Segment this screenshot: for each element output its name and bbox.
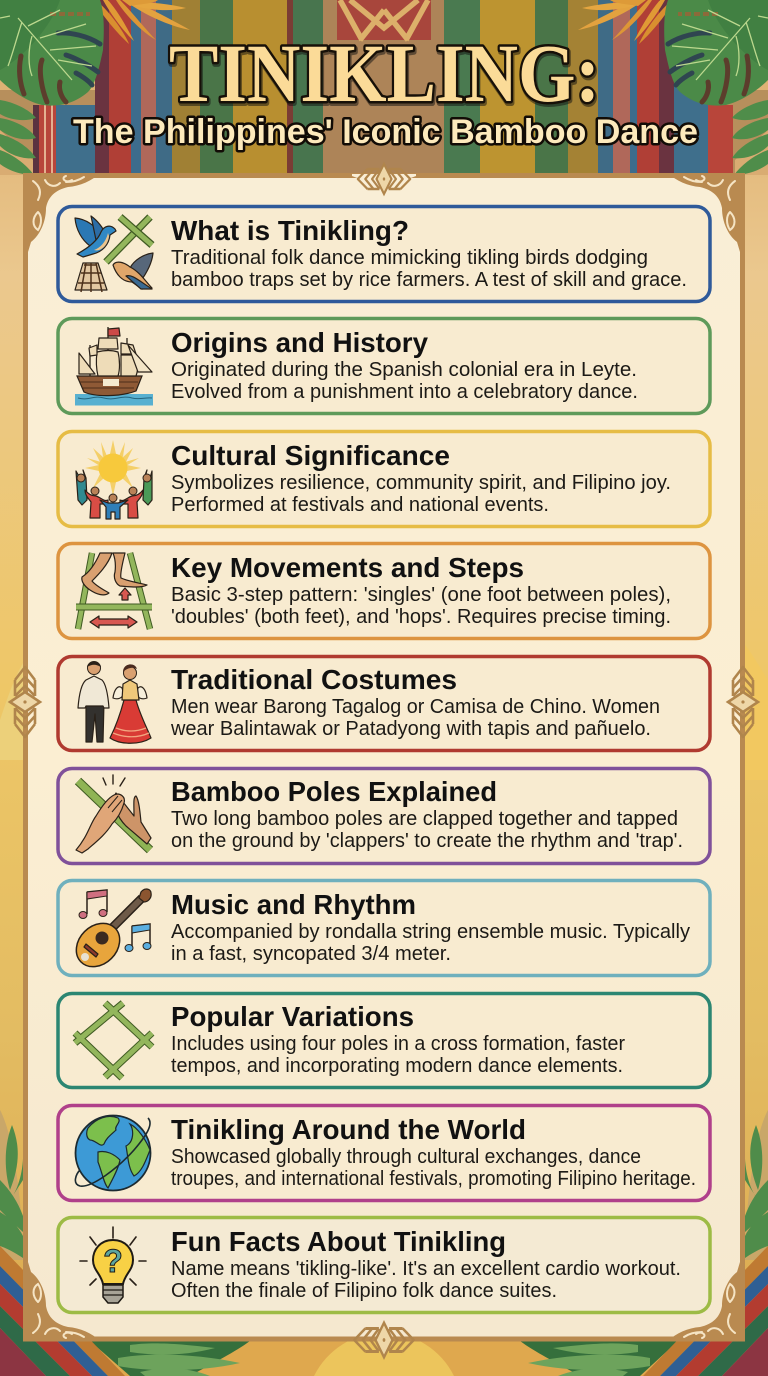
text block: tempos, and incorporating modern dance elements.: [171, 1055, 623, 1077]
text block: Evolved from a punishment into a celebratory dance.: [171, 381, 638, 403]
panel: Bamboo Poles Explained: [58, 768, 710, 864]
text block: bamboo traps set by rice farmers. A test of skill and grace.: [171, 269, 687, 291]
tropical leaves: top right: [578, 0, 768, 175]
icon: man and woman in traditional dress: [78, 662, 151, 743]
heading: Fun Facts About Tinikling: [171, 1226, 506, 1257]
text block: Men wear Barong Tagalog or Camisa de Chino. Women: [171, 696, 660, 718]
bottom scenery: sun, palms and woven bands: [0, 1110, 768, 1376]
heading: Bamboo Poles Explained: [171, 776, 497, 807]
text block: Includes using four poles in a cross formation, faster: [171, 1033, 625, 1055]
text block: Symbolizes resilience, community spirit, and Filipino joy.: [171, 472, 671, 494]
heading: Popular Variations: [171, 1001, 414, 1032]
text block: wear Balintawak or Patadyong with tapis and pañuelo.: [170, 718, 651, 740]
text block: 'doubles' (both feet), and 'hops'. Requires precise timing.: [171, 606, 671, 628]
panel: Key Movements and Steps: [58, 544, 710, 638]
text block: Accompanied by rondalla string ensemble music. Typically: [171, 921, 690, 943]
title: TINIKLING:: [169, 27, 600, 119]
woven diamond motif: [337, 0, 431, 40]
text block: on the ground by 'clappers' to create the rhythm and 'trap'.: [171, 830, 683, 852]
subtitle: The Philippines' Iconic Bamboo Dance: [73, 113, 698, 151]
heading: Music and Rhythm: [171, 889, 416, 920]
heading: Origins and History: [171, 327, 429, 358]
text block: Traditional folk dance mimicking tikling birds dodging: [171, 247, 648, 269]
heading: Cultural Significance: [171, 440, 450, 471]
panel: What is Tinikling?: [58, 206, 710, 302]
icon: four bamboo poles in a cross formation: [75, 1003, 152, 1078]
title: TINIKLING:: [170, 29, 601, 121]
panel: Popular Variations: [58, 994, 710, 1088]
text block: Name means 'tikling-like'. It's an excellent cardio workout.: [171, 1258, 681, 1280]
woven textile stripes banner: [0, 0, 768, 175]
text block: Two long bamboo poles are clapped together and tapped: [171, 808, 678, 830]
tropical leaves: top left: [0, 0, 190, 175]
icon: globe with orbit: [75, 1116, 150, 1190]
panel: Traditional Costumes: [58, 656, 710, 750]
text block: Performed at festivals and national events.: [171, 494, 549, 516]
text block: Showcased globally through cultural exchanges, dance: [171, 1146, 641, 1168]
heading: Tinikling Around the World: [171, 1114, 526, 1145]
icon: sun and circle of people: [76, 440, 152, 519]
heading: Traditional Costumes: [171, 664, 457, 695]
text block: Originated during the Spanish colonial era in Leyte.: [171, 359, 637, 381]
icon: light bulb with question mark: [80, 1227, 146, 1303]
panel: Tinikling Around the World: [58, 1106, 710, 1200]
heading: What is Tinikling?: [171, 215, 409, 246]
text block: in a fast, syncopated 3/4 meter.: [171, 943, 451, 965]
icon: galleon ship: [75, 327, 153, 406]
text block: troupes, and international festivals, promoting Filipino heritage.: [171, 1168, 696, 1190]
text block: Often the finale of Filipino folk dance suites.: [171, 1280, 557, 1302]
panel: Music and Rhythm: [58, 880, 710, 976]
icon: feet stepping over bamboo: [76, 553, 152, 629]
panel: Fun Facts About Tinikling: [58, 1218, 710, 1312]
icon: mandolin and music notes: [68, 889, 151, 975]
icon: birds, bamboo and trap: [75, 216, 153, 292]
panel: Cultural Significance: [58, 432, 710, 526]
panel: Origins and History: [58, 318, 710, 414]
icon: light bulb with question mark: ?: [103, 1243, 123, 1279]
icon: hands clapping bamboo pole: [76, 775, 151, 853]
text block: Basic 3-step pattern: 'singles' (one foot between poles),: [171, 584, 671, 606]
heading: Key Movements and Steps: [171, 552, 524, 583]
